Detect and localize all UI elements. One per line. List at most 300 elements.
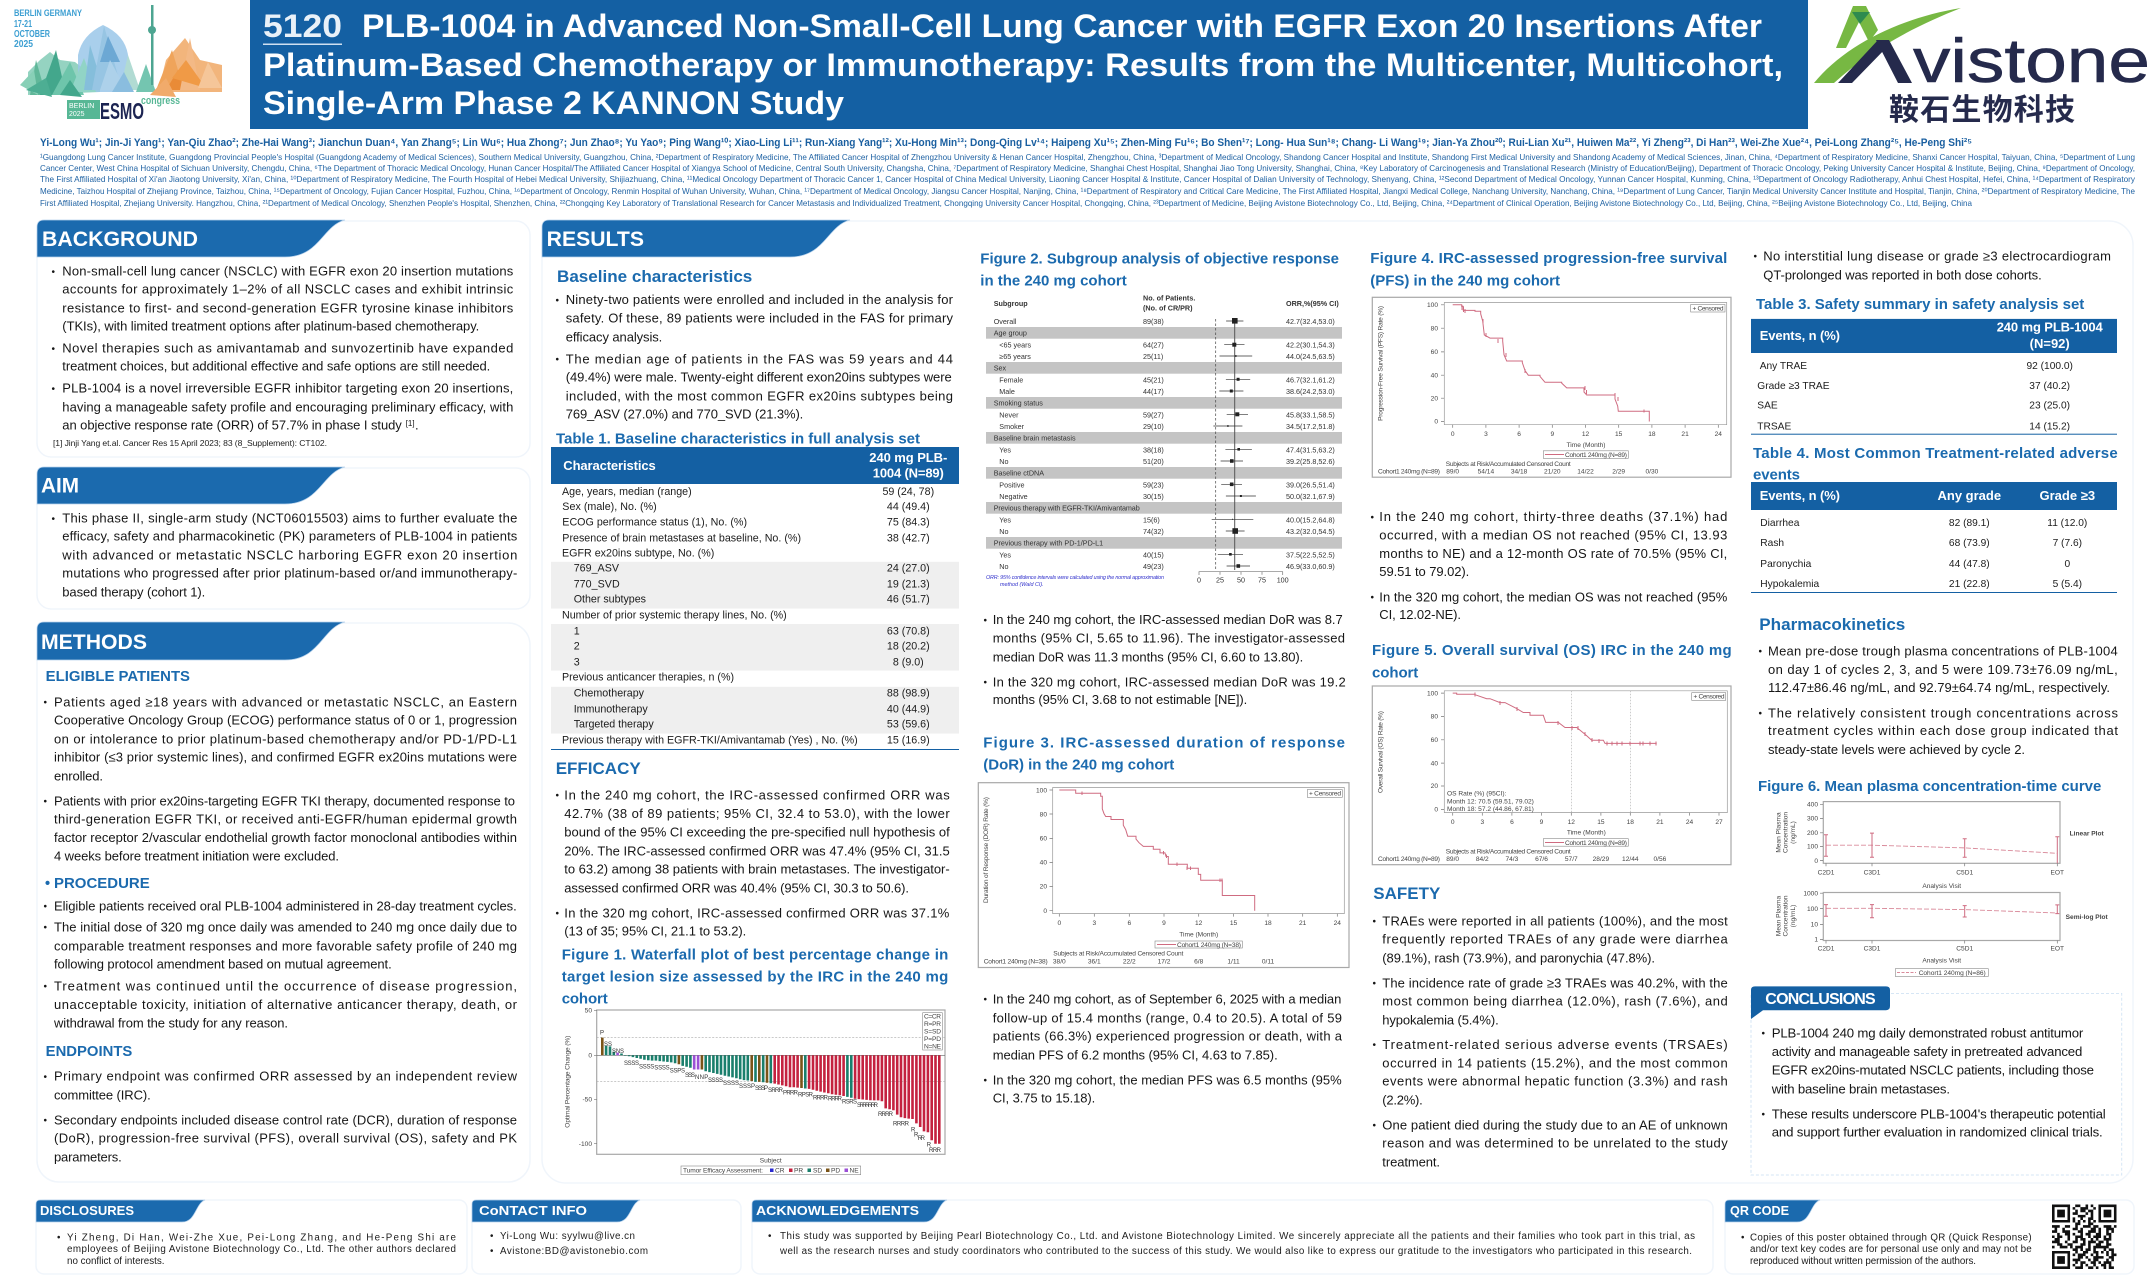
efficacy text (556, 787, 950, 938)
eligible patients text: • (44, 796, 48, 808)
chart: forest plot: 100 (1277, 576, 1289, 585)
chart: forest plot: 75 (1258, 576, 1266, 585)
bar labels: SSS (685, 1073, 695, 1079)
chart: progression-free survival KM curve: 14/22 (1577, 469, 1594, 476)
safety text: Treatment-related serious adverse events (TRSAEs) (1382, 1037, 1728, 1052)
chart: overall survival KM curve: 67/6 (1535, 856, 1548, 863)
safety text: reason and was determined to be unrelated to the study (1382, 1135, 1728, 1150)
conclusions text: and support further evaluation in randomized clinical trials. (1772, 1124, 2103, 1139)
chart: semi-log plasma concentration plot: 100 (1807, 906, 1818, 913)
heading: results: RESULTS (547, 228, 644, 251)
chart: duration of response KM curve (978, 783, 1349, 968)
safety text: • (1372, 916, 1376, 928)
table 1: baseline characteristics: 8 (9.0) (893, 656, 924, 668)
DoR text: In the 320 mg cohort, IRC-assessed median DoR was 19.2 (993, 674, 1346, 689)
chart: semi-log plasma concentration plot: EOT (2051, 946, 2064, 952)
chart: overall survival KM curve: 40 (1431, 760, 1438, 767)
chart: forest plot: 59(23) (1143, 480, 1164, 489)
chart: duration of response KM curve: 40 (1040, 860, 1047, 867)
panel: disclosures (36, 1200, 467, 1274)
subheading: procedure: PROCEDURE (54, 876, 150, 892)
baseline text: (49.4%) were male. Twenty-eight different exon20ins subtypes were (566, 370, 952, 385)
chart: forest plot: Smoker (999, 422, 1025, 431)
aim text: with advanced or metastatic NSCLC harboring EGFR exon 20 insertion (61, 548, 517, 563)
table 4: treatment-related adverse events: 21 (22.8) (1949, 579, 1990, 590)
chart: progression-free survival KM curve: 18 (1648, 431, 1656, 438)
background bullets: treatment choices, but additional effective and safe options are still needed. (62, 359, 490, 374)
table 1: baseline characteristics: 18 (20.2) (887, 641, 930, 653)
figure 1 title: target lesion size assessed by the IRC in the 240 mg (562, 968, 948, 985)
chart: forest plot: No (999, 527, 1009, 536)
waterfall key: S=SD (924, 1028, 941, 1036)
waterfall legend (681, 1166, 861, 1175)
title banner: Platinum-Based Chemotherapy or Immunotherapy: Results from the Multicenter, Multicohort, (263, 47, 1783, 83)
chart: overall survival KM curve: 60 (1431, 737, 1438, 744)
table 3: safety summary: Any TRAE (1760, 361, 1807, 372)
chart: progression-free survival KM curve: 12 (1582, 431, 1589, 438)
affiliations: Medicine, Taizhou Hospital of Zhejiang Province, Taizhou, China, ¹⁵Department of Oncology, Fujian Cancer Hospital, Fuzhou, China, ¹⁶Department of Oncology, Renmin Hospital of Wuhan University, Wuhan, China, ¹⁷Department of Medical Oncology, Jiangsu Cancer Hospital, Nanjing, China, ¹⁸Department of Respiratory and Critical Care Medicine, The First Affiliated Hospital, Jiangxi Medical College, Nanchang University, Nanchang, China, ¹⁹Department of Lung Cancer, Tianjin Medical University Cancer Institute and Hospital, Tianjin, China, ²⁰Department of Respiratory Medicine, The (40, 186, 2135, 196)
panel: results (542, 220, 2133, 1183)
table 1: baseline characteristics: Presence of brain metastases at baseline, No. (%) (562, 532, 801, 544)
eligible patients text: inhibitor (≤3 prior systemic lines), and confirmed EGFR ex20ins mutations were (54, 749, 517, 764)
eligible patients text: • (44, 698, 48, 708)
bar labels: RR (918, 1136, 926, 1142)
chart: duration of response KM curve: 21 (1299, 920, 1307, 927)
chart: forest plot: 37.5(22.5,52.5) (1286, 550, 1335, 559)
chart: overall survival KM curve: 28/29 (1593, 856, 1609, 863)
waterfall legend: PD (831, 1168, 840, 1175)
background bullets: Novel therapies such as amivantamab and sunvozertinib have expanded (62, 341, 513, 356)
safety text: (89.1%), rash (73.9%), and paronychia (47.8%). (1382, 950, 1655, 965)
pharmacokinetics text: treatment cycles within each dose group indicated that (1768, 723, 2118, 738)
chart: forest plot: (No. of CR/PR) (1143, 304, 1193, 313)
contact text: Avistone:BD@avistonebio.com (500, 1246, 648, 1257)
chart: forest plot: 30(15) (1143, 492, 1164, 501)
bar labels (600, 1030, 942, 1154)
waterfall axis labels (564, 1008, 782, 1165)
bar labels: RSRS (842, 1100, 857, 1106)
chart: duration of response KM curve: 36/1 (1088, 958, 1101, 966)
table 1: baseline characteristics: Previous therapy with EGFR-TKI/Amivantamab (Yes) , No. (%) (562, 735, 858, 747)
subheading: pharmacokinetics: Pharmacokinetics (1759, 615, 1905, 634)
chart: forest plot: 47.4(31.5,63.2) (1286, 445, 1335, 454)
chart: linear plasma concentration plot: 100 (1807, 844, 1818, 851)
table 1: baseline characteristics: 40 (44.9) (887, 704, 930, 716)
panel: aim (37, 467, 530, 609)
conclusions text: EGFR ex20ins-mutated NSCLC patients, including those (1772, 1062, 2094, 1077)
waterfall key: R=PR (924, 1021, 941, 1028)
table 1: baseline characteristics: 75 (84.3) (887, 517, 930, 529)
chart: linear plasma concentration plot (1776, 802, 2105, 890)
table 4: treatment-related adverse events: 11 (12.0) (2047, 518, 2087, 529)
acknowledgements text: well as the research nurses and study coordinators who contributed to the success of this study. We would also like to express our gratitude to the investigators who participated in this research. (779, 1246, 1692, 1257)
aim text: This phase II, single-arm study (NCT06015503) aims to further evaluate the (62, 511, 517, 526)
aim text: based therapy (cohort 1). (62, 585, 205, 600)
safety text: • (1372, 1120, 1376, 1132)
chart: forest plot: 59(27) (1143, 410, 1164, 419)
bar labels: R (911, 1127, 916, 1133)
chart: forest plot: 34.5(17.2,51.8) (1286, 422, 1335, 431)
safety text: hypokalemia (5.4%). (1382, 1012, 1499, 1027)
table 4: treatment-related adverse events (1751, 445, 2118, 593)
chart: progression-free survival KM curve: 80 (1431, 325, 1438, 332)
table 4: treatment-related adverse events: Diarrhea (1760, 518, 1800, 529)
contact text: • (490, 1246, 494, 1257)
chart: linear plasma concentration plot: 300 (1807, 816, 1818, 823)
waterfall legend: Tumor Efficacy Assessment: (683, 1168, 763, 1175)
chart: overall survival KM curve: 84/2 (1476, 856, 1489, 863)
efficacy text: • (556, 790, 560, 802)
chart: semi-log plasma concentration plot: C2D1 (1818, 946, 1835, 952)
heading: disclosures: DISCLOSURES (40, 1203, 134, 1218)
chart: duration of response KM curve: 0 (1057, 920, 1061, 927)
table 3: safety summary: 92 (100.0) (2026, 361, 2073, 372)
chart: overall survival KM curve: 74/3 (1505, 856, 1519, 863)
congress logo: ESMO Berlin 2025: BERLIN GERMANY (14, 8, 82, 18)
table 4: treatment-related adverse events: 68 (73.9) (1949, 538, 1990, 549)
table 3: safety summary: 240 mg PLB-1004 (1997, 320, 2103, 335)
table 1: baseline characteristics: 15 (16.9) (887, 735, 930, 747)
bar labels: SSSS (639, 1065, 654, 1071)
safety text continued: No interstitial lung disease or grade ≥3 electrocardiogram (1763, 248, 2111, 263)
chart: duration of response KM curve: 12 (1195, 920, 1203, 927)
chart: forest plot: Sex (994, 364, 1006, 373)
background bullets: • (52, 267, 56, 278)
table 3: safety summary: 23 (25.0) (2029, 401, 2070, 412)
baseline text: 769_ASV (27.0%) and 770_SVD (21.3%). (566, 406, 803, 422)
chart: duration of response KM curve: 18 (1264, 920, 1272, 927)
affiliations (40, 152, 2136, 208)
safety text continued (1754, 248, 2111, 283)
chart: duration of response KM curve: 1/11 (1227, 958, 1240, 966)
waterfall legend: CR (775, 1168, 785, 1175)
forest plot footnote: ORR: 95% confidence intervals were calculated using the normal approximation (986, 575, 1164, 581)
chart: progression-free survival KM curve: 21/20 (1544, 469, 1561, 476)
chart: linear plasma concentration plot: EOT (2051, 870, 2064, 877)
table 1: baseline characteristics: Table 1. Baseline characteristics in full analysis set (556, 430, 920, 447)
chart: overall survival KM curve: 0 (1451, 819, 1455, 826)
waterfall key (923, 1013, 942, 1050)
QR text: Copies of this poster obtained through QR (Quick Response) (1750, 1233, 2032, 1244)
chart: progression-free survival KM curve: 54/14 (1478, 469, 1494, 476)
chart: semi-log plasma concentration plot: Semi-log Plot (2066, 914, 2109, 921)
QR text (1741, 1233, 2032, 1267)
pharmacokinetics text: on day 1 of cycles 2, 3, and 5 were 109.73±76.09 ng/mL, (1768, 662, 2118, 677)
chart: duration of response KM curve: 0 (1043, 908, 1047, 915)
panel: background (37, 220, 530, 457)
chart: overall survival KM curve: 89/0 (1446, 856, 1459, 863)
OS text (1370, 509, 1728, 622)
chart: overall survival KM curve: 12/44 (1622, 856, 1639, 863)
bar labels: RRRR (828, 1096, 843, 1102)
baseline text (556, 292, 954, 422)
disclosures text: employees of Beijing Avistone Biotechnology Co., Ltd. The other authors declared (67, 1244, 456, 1255)
background bullets: • (52, 344, 56, 355)
chart: overall survival KM curve: 6 (1510, 819, 1514, 826)
chart: forest plot: Negative (999, 492, 1028, 501)
chart: duration of response KM curve: 60 (1040, 836, 1047, 843)
baseline text: safety. Of these, 89 patients were included in the FAS for primary (566, 310, 954, 325)
chart: semi-log plasma concentration plot: Analysis Visit (1922, 957, 1961, 964)
procedure text: unacceptable toxicity, initiation of alternative anticancer therapy, death, or (54, 997, 518, 1012)
bar labels: RRR (929, 1148, 942, 1154)
affiliations: Cancer Center, West China Hospital of Sichuan University, Chengdu, China, ⁶The Department of Thoracic Medical Oncology, Hunan Cancer Hospital/The Affiliated Cancer Hospital of Xiangya School of Medicine, Central South University, Changsha, China, ⁷Department of Respiratory Medicine, Shanghai Chest Hospital, Shanghai Jiao Tong University, Shanghai, China, ⁸Key Laboratory of Carcinogenesis and Translational Research (Ministry of Education/Beijing), Department of Thoracic Oncology, Peking University Cancer Hospital & Institute, Beijing, China, ⁹Department of Oncology, (40, 163, 2135, 173)
company logo: Avistone (1814, 6, 2150, 127)
chart: forest plot: 89(38) (1143, 317, 1164, 326)
chart: progression-free survival KM curve: 24 (1715, 431, 1722, 438)
figure 5 title: Figure 5. Overall survival (OS) IRC in the 240 mg (1372, 642, 1732, 659)
eligible patients text: Cooperative Oncology Group (ECOG) performance status of 0 or 1, progression (54, 713, 517, 728)
conclusions text: • (1762, 1029, 1766, 1040)
chart: progression-free survival KM curve: Progression-Free Survival (PFS) Rate (%) (1378, 306, 1385, 421)
efficacy text: assessed confirmed ORR was 40.4% (95% CI, 30.3 to 50.6). (564, 880, 909, 895)
eligible patients text: third-generation EGFR TKI, or received anti-EGFR/human epidermal growth (54, 811, 517, 826)
table 3: safety summary: Events, n (%) (1760, 328, 1840, 343)
chart: forest plot: 50.0(32.1,67.9) (1286, 492, 1335, 501)
contact text: • (490, 1231, 494, 1242)
contact text: Yi-Long Wu: syylwu@live.cn (500, 1231, 635, 1242)
bar labels: R (927, 1142, 932, 1148)
baseline text: included, with the most common EGFR ex20ins subtypes being (566, 389, 953, 404)
bar labels: SSSS (723, 1081, 739, 1087)
PFS text: median PFS of 6.2 months (95% CI, 4.63 to 7.85). (993, 1048, 1278, 1062)
figure 2 title: Figure 2. Subgroup analysis of objective response (980, 250, 1339, 267)
chart: semi-log plasma concentration plot: 1000 (1803, 890, 1818, 897)
chart: duration of response KM curve: + Censored (1309, 790, 1341, 798)
pharmacokinetics text (1758, 643, 2118, 757)
chart: progression-free survival KM curve (1372, 297, 1731, 477)
figure 4 title: (PFS) in the 240 mg cohort (1370, 272, 1560, 290)
congress logo: ESMO Berlin 2025: 2025 (14, 39, 33, 50)
chart: forest plot: No (999, 457, 1009, 466)
OS text: In the 240 mg cohort, thirty-three deaths (37.1%) had (1379, 509, 1727, 524)
chart: forest plot: Male (999, 387, 1015, 396)
aim text (52, 511, 518, 600)
chart: overall survival KM curve: 27 (1715, 819, 1723, 826)
table 1: baseline characteristics: 769_ASV (574, 563, 620, 575)
table 4: treatment-related adverse events: 44 (47.8) (1949, 559, 1990, 570)
bar labels: SSPS (670, 1068, 685, 1074)
bars: stable disease (606, 1046, 851, 1098)
QR text: reproduced without written permission of the authors. (1750, 1256, 1976, 1267)
background bullets: resistance to first- and second-generation EGFR tyrosine kinase inhibitors (62, 301, 514, 316)
chart: forest plot: 44(17) (1143, 387, 1164, 396)
chart: duration of response KM curve: Time (Month) (1179, 932, 1218, 938)
table 4: treatment-related adverse events: 7 (7.6) (2053, 538, 2082, 549)
icon: QR code (2052, 1206, 2116, 1268)
DoR text: median DoR was 11.3 months (95% CI, 6.60 to 13.80). (993, 649, 1303, 664)
chart: waterfall plot (564, 1008, 945, 1175)
efficacy text: (13 of 35; 95% CI, 21.1 to 53.2). (564, 923, 746, 938)
panel: methods (37, 622, 530, 1182)
OS text: • (1370, 512, 1374, 523)
disclosures text: • (57, 1233, 61, 1244)
chart: forest plot: 42.2(30.1,54.3) (1286, 340, 1335, 349)
bar labels: SSSP (739, 1084, 755, 1090)
figure 2 title (980, 250, 1339, 289)
table 1: baseline characteristics: 19 (21.3) (887, 579, 930, 591)
chart: progression-free survival KM curve: 6 (1517, 431, 1521, 438)
chart: overall survival KM curve: Overall Survival (OS) Rate (%) (1378, 711, 1385, 793)
waterfall legend: SD (813, 1168, 822, 1175)
waterfall axis labels: 50 (585, 1008, 592, 1014)
chart: duration of response KM curve: 20 (1040, 884, 1047, 891)
congress logo: ESMO Berlin 2025: congress (141, 95, 180, 107)
pharmacokinetics text: • (1758, 708, 1762, 720)
table 1: baseline characteristics: EGFR ex20ins subtype, No. (%) (562, 548, 714, 560)
affiliations: The First Affiliated Hospital of Xi'an Jiaotong University, Xi'an, China, ¹⁰Department of Respiratory Medicine, The Fourth Hospital of Hebei Medical University, Shijiazhuang, China, ¹¹Medical Oncology Department of Thoracic Cancer 1, Cancer Hospital of China Medical University, Liaoning Cancer Hospital & Institute, Cancer Hospital of Dalian University of Technology, Shenyang, China, ¹²Second Department of Medical Oncology, Yunnan Cancer Hospital, Kunming, China, ¹³Department of Oncology Radiotherapy, Anhui Chest Hospital, Hefei, China, ¹⁴Department of Respiratory (40, 174, 2136, 184)
chart: overall survival KM curve: Cohort1 240mg (N=89) (1565, 840, 1627, 847)
PFS text: In the 320 mg cohort, the median PFS was 6.5 months (95% (993, 1072, 1342, 1088)
conclusions text: with baseline brain metastases. (1771, 1081, 1950, 1096)
table 4: treatment-related adverse events: 82 (89.1) (1949, 518, 1990, 529)
chart: linear plasma concentration plot: 0 (1814, 858, 1818, 865)
procedure text: Treatment was continued until the occurrence of disease progression, (54, 978, 517, 993)
chart: semi-log plasma concentration plot: Mean Plasma (1776, 896, 1782, 936)
chart: duration of response KM curve: 100 (1036, 787, 1047, 794)
authors: Yi-Long Wu¹; Jin-Ji Yang¹; Yan-Qiu Zhao²; Zhe-Hai Wang³; Jianchun Duan⁴, Yan Zhang⁵; Lin Wu⁶; Hua Zhong⁷; Jun Zhao⁸; Yu Yao⁹; Ping Wang¹⁰; Xiao-Ling Li¹¹; Run-Xiang Yang¹²; Xu-Hong Min¹³; Dong-Qing Lv¹⁴; Haipeng Xu¹⁵; Zhen-Ming Fu¹⁶; Bo Shen¹⁷; Long- Hua Sun¹⁸; Chang- Li Wang¹⁹; Jian-Ya Zhou²⁰; Rui-Lian Xu²¹, Huiwen Ma²², Yi Zheng²³, Di Han²³, Wei-Zhe Xue²⁴, Pei-Long Zhang²⁵, He-Peng Shi²⁵ (40, 137, 1972, 149)
figure 1 title (562, 946, 948, 1007)
title banner: 5120 (263, 8, 342, 44)
chart: forest plot: Subgroup (994, 299, 1028, 308)
chart: overall survival KM curve: 20 (1431, 783, 1438, 790)
chart: forest plot: Female (999, 375, 1023, 384)
DoR text (984, 612, 1346, 707)
chart: overall survival KM curve: 18 (1627, 819, 1634, 826)
chart: forest plot: 40(15) (1143, 550, 1164, 559)
endpoints text: Secondary endpoints included disease control rate (DCR), duration of response (54, 1112, 517, 1128)
chart: semi-log plasma concentration plot: C3D1 (1864, 946, 1881, 952)
QR text: • (1741, 1233, 1745, 1244)
safety text: treatment. (1382, 1154, 1440, 1169)
chart: overall survival KM curve: OS Rate (%) (95CI): (1447, 791, 1507, 798)
chart: duration of response KM curve: 24 (1334, 920, 1341, 927)
table 1: baseline characteristics: 53 (59.6) (887, 719, 930, 731)
chart: duration of response KM curve: Subjects at Risk/Accumulated Censored Count (1053, 950, 1183, 958)
DoR curve (1059, 790, 1255, 911)
chart: forest plot: 46.9(33.0,60.9) (1286, 562, 1335, 571)
table 4: treatment-related adverse events: Grade ≥3 (2040, 488, 2095, 503)
chart: forest plot: Yes (999, 515, 1011, 524)
bar labels: RRRR (813, 1096, 829, 1102)
OS text: occurred, with a median OS not reached (95% CI, 13.93 (1379, 527, 1727, 542)
bar labels: SNS (612, 1049, 624, 1055)
bar labels: RRRR (893, 1121, 910, 1127)
table 1: baseline characteristics: 3 (574, 656, 580, 668)
company logo: Avistone: 鞍石生物科技 (1889, 94, 2075, 127)
chart: forest plot: 39.2(25.8,52.6) (1286, 457, 1335, 466)
acknowledgements text (768, 1231, 1695, 1257)
procedure text: • (44, 902, 48, 913)
endpoints text: (DoR), progression-free survival (PFS), overall survival (OS), safety and PK (54, 1130, 517, 1145)
chart: linear plasma concentration plot: C3D1 (1864, 870, 1881, 877)
background bullets (52, 264, 514, 433)
heading: contact info: CoNTACT INFO (479, 1203, 587, 1218)
table 3: safety summary: 37 (40.2) (2029, 381, 2070, 392)
PFS text: • (984, 995, 988, 1006)
conclusions text: PLB-1004 240 mg daily demonstrated robust antitumor (1772, 1025, 2084, 1040)
chart: overall survival KM curve: 57/7 (1565, 856, 1578, 863)
safety text: The incidence rate of grade ≥3 TRAEs was 40.2%, with the (1382, 975, 1728, 990)
chart: progression-free survival KM curve: 15 (1615, 431, 1623, 438)
chart: linear plasma concentration plot: Linear Plot (2070, 830, 2105, 838)
safety text: events were abnormal hepatic function (3.3%) and rash (1382, 1073, 1728, 1088)
aim text: • (52, 514, 56, 525)
heading: aim: AIM (41, 475, 79, 498)
table 1: baseline characteristics: Other subtypes (574, 594, 646, 606)
chart: forest plot: Yes (999, 445, 1011, 454)
chart: overall survival KM curve: 0 (1434, 807, 1438, 814)
efficacy text: In the 320 mg cohort, IRC-assessed confirmed ORR was 37.1% (564, 905, 950, 920)
table 1: baseline characteristics: 63 (70.8) (887, 625, 930, 637)
chart: forest plot: Previous therapy with EGFR-TKI/Amivantamab (994, 504, 1140, 513)
OS text: In the 320 mg cohort, the median OS was not reached (95% (1379, 589, 1728, 604)
waterfall key: N=NE (924, 1044, 942, 1050)
eligible patients text: 4 weeks before treatment initiation were excluded. (54, 848, 339, 864)
table 1: baseline characteristics: 2 (574, 641, 580, 653)
chart: overall survival KM curve: Month 18: 57.2 (44.86, 67.81) (1447, 806, 1534, 813)
bars: progressive disease (602, 1038, 802, 1088)
chart: semi-log plasma concentration plot: 1 (1814, 937, 1818, 944)
safety text: frequently reported TRAEs of any grade were diarrhea (1382, 931, 1728, 946)
heading: methods: METHODS (41, 631, 147, 654)
table 4: treatment-related adverse events: 5 (5.4) (2053, 579, 2082, 590)
endpoints text: Primary endpoint was confirmed ORR assessed by an independent review (54, 1069, 518, 1084)
chart: progression-free survival KM curve: Subjects at Risk/Accumulated Censored Count (1446, 461, 1571, 468)
chart: forest plot: Overall (994, 317, 1017, 326)
chart: forest plot: 43.2(32.0,54.5) (1286, 527, 1335, 536)
chart: overall survival KM curve: 15 (1597, 819, 1605, 826)
chart: linear plasma concentration plot: Mean Plasma (1776, 812, 1782, 853)
panel: conclusions (1751, 986, 2122, 1175)
chart: progression-free survival KM curve: 20 (1431, 395, 1438, 402)
DoR text: months (95% CI, 5.65 to 11.96). The investigator-assessed (993, 630, 1345, 645)
chart: semi-log plasma concentration plot (1776, 890, 2109, 977)
table 1: baseline characteristics: 240 mg PLB- (869, 450, 947, 465)
subheading: baseline characteristics: Baseline characteristics (557, 268, 752, 286)
PFS text: • (984, 1076, 988, 1087)
table 1: baseline characteristics: Number of prior systemic therapy lines, No. (%) (562, 610, 787, 622)
eligible patients text: Patients aged ≥18 years with advanced or metastatic NSCLC, an Eastern (54, 694, 517, 709)
chart: forest plot: No (999, 562, 1009, 571)
PFS text: In the 240 mg cohort, as of September 6, 2025 with a median (993, 992, 1341, 1006)
chart: linear plasma concentration plot: 200 (1807, 830, 1818, 837)
title banner (250, 0, 1808, 129)
PFS text: CI, 3.75 to 15.18). (993, 1090, 1095, 1105)
bar labels: P (600, 1030, 604, 1036)
table 1: baseline characteristics: Immunotherapy (574, 704, 648, 716)
reference: [1] Jinji Yang et.al. Cancer Res 15 April 2023; 83 (8_Supplement): CT102. (53, 438, 327, 448)
chart: linear plasma concentration plot: 400 (1807, 802, 1818, 808)
chart: overall survival KM curve: + Censored (1694, 694, 1725, 700)
safety text continued: • (1754, 252, 1758, 262)
heading: QR code: QR CODE (1730, 1203, 1789, 1218)
chart: linear plasma concentration plot: (ng/mL) (1790, 821, 1797, 844)
bars: not evaluable (618, 1053, 698, 1070)
chart: forest plot: Previous therapy with PD-1/PD-L1 (994, 539, 1103, 548)
table 4: treatment-related adverse events: Any grade (1938, 488, 2001, 503)
bars: partial response (775, 1055, 939, 1144)
table 1: baseline characteristics: 46 (51.7) (887, 594, 930, 606)
pharmacokinetics text: 112.47±86.46 ng/mL, and 92.79±64.74 ng/mL, respectively. (1768, 680, 2110, 695)
OS text: 59.51 to 79.02). (1379, 564, 1469, 579)
background bullets: Non-small-cell lung cancer (NSCLC) with EGFR exon 20 insertion mutations (62, 264, 514, 279)
table 3: safety summary: SAE (1757, 401, 1778, 412)
efficacy text: to 63.2) among 38 patients with brain metastases. The investigator- (564, 861, 950, 876)
panel: contact info (472, 1200, 741, 1274)
chart: duration of response KM curve: 9 (1162, 920, 1166, 927)
chart: overall survival KM curve: Subjects at Risk/Accumulated Censored Count (1446, 849, 1571, 856)
